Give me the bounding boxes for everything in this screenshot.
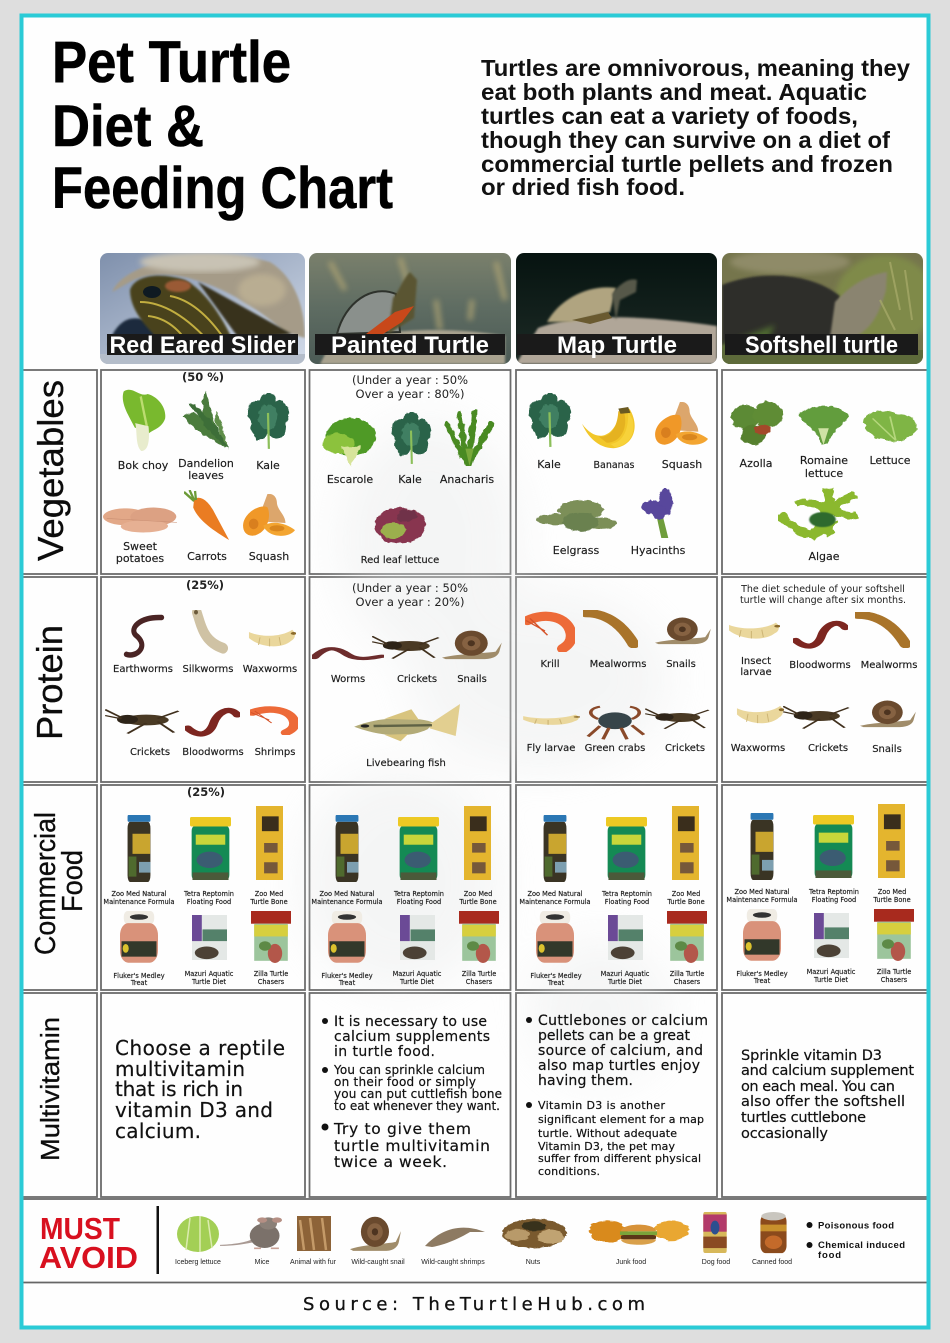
product: Fluker's Medley Treat: Treat (753, 977, 771, 985)
item: dandelion leaves (178, 391, 234, 482)
intro text block: though they can survive on a diet of (481, 127, 890, 153)
product: Tetra Reptomin Floating Food: Floating Food (187, 898, 231, 906)
bullet: calcium supplements: calcium supplements (334, 1029, 490, 1045)
item: bloodworms: Bloodworms (789, 660, 851, 671)
source line: Source: TheTurtleHub.com (303, 1294, 645, 1315)
item: eelgrass (536, 500, 617, 557)
intro text block: or dried fish food. (481, 174, 685, 200)
item: snails: Snails (666, 659, 696, 670)
item: silkworms (183, 610, 233, 675)
panel: multivitamin, softshell turtle: turtles cuttlebone (741, 1110, 866, 1126)
product: Zoo Med Turtle Bone: Zoo Med (672, 890, 700, 898)
product: Fluker's Medley Treat: Fluker's Medley (530, 972, 582, 980)
photo: Map Turtle (516, 253, 717, 364)
item: canned food: Canned food (752, 1259, 792, 1266)
item: kale (528, 393, 571, 471)
photo: Red Eared Slider (100, 252, 305, 366)
panel: protein, painted turtle (314, 581, 502, 769)
item: mealworms (586, 613, 646, 670)
product: Mazuri Aquatic Turtle Diet: Turtle Diet (191, 978, 226, 986)
item: crickets (105, 710, 178, 758)
panel: multivitamin, red eared slider (115, 1036, 285, 1143)
item: crickets: Crickets (397, 674, 437, 685)
item: snails (655, 618, 711, 670)
product: Fluker's Medley Treat (530, 911, 582, 987)
share note: Over a year : 20%) (356, 595, 464, 609)
panel: multivitamin, red eared slider: that is rich in (115, 1077, 243, 1101)
bullet: cuttlebones: having them. (538, 1073, 633, 1089)
product: Tetra Reptomin Floating Food: Floating Food (397, 898, 441, 906)
bullet: calcium supplements (322, 1014, 490, 1060)
panel: multivitamin, softshell turtle: on each meal. You can (741, 1079, 895, 1095)
item: kale (247, 393, 289, 472)
item: romaine lettuce (798, 406, 849, 480)
share note: (25%) (187, 785, 225, 799)
product: Zoo Med Turtle Bone: Turtle Bone (666, 898, 705, 906)
item: crickets: Crickets (665, 743, 705, 754)
item: lettuce: Lettuce (869, 454, 911, 467)
item: anacharis (440, 413, 494, 486)
bullet: sprinkle calcium: You can sprinkle calcium (333, 1063, 485, 1077)
item: wild-caught snail (350, 1217, 405, 1266)
product: Zilla Turtle Chasers: Zilla Turtle (670, 970, 704, 978)
product: Fluker's Medley Treat (736, 909, 788, 985)
item: mice (220, 1217, 282, 1266)
bullet: twice a week: turtle multivitamin (334, 1137, 490, 1155)
bullet: cuttlebones: also map turtles enjoy (538, 1058, 700, 1074)
panel: multivitamin, softshell turtle: occasionally (741, 1126, 828, 1142)
item: kale (391, 412, 431, 486)
bullet: cuttlebones: Cuttlebones or calcium (538, 1013, 708, 1029)
product: Zoo Med Turtle Bone (458, 806, 497, 906)
item: sweet potatoes: potatoes (116, 552, 164, 565)
item: carrots (184, 490, 229, 563)
row label: Vegetables: Vegetables (30, 380, 71, 561)
bullet: vitamin D3: suffer from different physical (538, 1152, 701, 1165)
product: Zilla Turtle Chasers: Chasers (466, 978, 493, 986)
item: dog food (702, 1212, 730, 1266)
item: red leaf lettuce (361, 508, 439, 566)
product: Tetra Reptomin Floating Food: Tetra Reptomin (183, 890, 234, 898)
product: Zilla Turtle Chasers (874, 909, 914, 984)
intro text block: commercial turtle pellets and frozen (481, 151, 893, 177)
product: Mazuri Aquatic Turtle Diet: Mazuri Aquatic (601, 970, 650, 978)
item: waxworms (731, 706, 785, 754)
product: Zoo Med Turtle Bone: Turtle Bone (872, 896, 911, 904)
share note: (Under a year : 50% (352, 581, 468, 595)
bullet: sprinkle calcium: to eat whenever they want. (334, 1099, 500, 1113)
item: wild-caught shrimps: Wild-caught shrimps (421, 1259, 485, 1266)
product: Mazuri Aquatic Turtle Diet (393, 915, 442, 986)
product: Zilla Turtle Chasers: Chasers (881, 976, 908, 984)
panel: commercial food, painted turtle (311, 806, 499, 987)
product: Zoo Med Natural Maintenance Formula: Maintenance Formula (519, 898, 591, 906)
must avoid heading (39, 1211, 138, 1275)
product: Zoo Med Natural Maintenance Formula (103, 815, 175, 906)
product: Zoo Med Natural Maintenance Formula: Zoo Med Natural (111, 890, 167, 898)
product: Tetra Reptomin Floating Food (393, 817, 444, 906)
item: shrimps: Shrimps (255, 747, 295, 758)
item: wild-caught snail: Wild-caught snail (351, 1259, 405, 1266)
item: bananas (582, 407, 635, 471)
row label: Commercial Food: Food (57, 850, 89, 912)
item: waxworms (243, 630, 297, 675)
item: romaine lettuce: lettuce (805, 467, 843, 480)
item: insect larvae (729, 623, 781, 678)
product: Tetra Reptomin Floating Food: Floating Food (605, 898, 649, 906)
panel: commercial food, red eared slider (103, 785, 291, 987)
share note: (Under a year : 50% (352, 373, 468, 387)
bullet: sprinkle calcium: you can put cuttlefish bone (334, 1087, 502, 1101)
schedule note: turtle will change after six months. (740, 595, 906, 606)
item: canned food (752, 1212, 792, 1266)
item: green crabs: Green crabs (585, 743, 645, 754)
product: Tetra Reptomin Floating Food (183, 817, 234, 906)
product: Mazuri Aquatic Turtle Diet: Mazuri Aquatic (807, 968, 856, 976)
item: iceberg lettuce (175, 1216, 221, 1266)
item: junk food: Junk food (616, 1259, 646, 1266)
item: snails: Snails (872, 744, 902, 755)
item: mealworms (858, 615, 917, 671)
item: bloodworms (789, 623, 851, 671)
item: bloodworms: Bloodworms (182, 747, 244, 758)
product: Tetra Reptomin Floating Food: Tetra Reptomin (601, 890, 652, 898)
item: dandelion leaves: Dandelion (178, 457, 234, 470)
product: Zoo Med Turtle Bone (249, 806, 288, 906)
panel: protein, red eared slider (105, 578, 297, 758)
row divider lines (22, 1199, 928, 1282)
intro text block: Turtles are omnivorous, meaning they (481, 55, 910, 81)
panel: vegetables, map turtle (528, 393, 708, 557)
photo: Painted Turtle (309, 253, 511, 364)
product: Zoo Med Natural Maintenance Formula: Maintenance Formula (103, 898, 175, 906)
product: Zoo Med Natural Maintenance Formula: Maintenance Formula (311, 898, 383, 906)
item: mice: Mice (255, 1259, 269, 1266)
product: Tetra Reptomin Floating Food: Tetra Reptomin (393, 890, 444, 898)
product: Tetra Reptomin Floating Food (808, 815, 859, 904)
schedule note: The diet schedule of your softshell (740, 584, 905, 595)
item: red leaf lettuce: Red leaf lettuce (361, 555, 439, 566)
product: Zoo Med Natural Maintenance Formula (311, 815, 383, 906)
product: Zoo Med Natural Maintenance Formula: Zoo Med Natural (527, 890, 583, 898)
caption: Red Eared Slider: Red Eared Slider (110, 332, 296, 359)
faint turtle watermark (300, 420, 670, 1080)
product: Mazuri Aquatic Turtle Diet (185, 915, 234, 986)
item: kale: Kale (537, 458, 561, 471)
product: Fluker's Medley Treat: Treat (338, 979, 356, 987)
item: dog food: Dog food (702, 1259, 730, 1266)
item: junk food (588, 1221, 689, 1266)
panel: protein, softshell turtle (729, 584, 917, 755)
grid cell frames (21, 370, 928, 1197)
item: animal with fur (290, 1216, 337, 1266)
product: Mazuri Aquatic Turtle Diet (807, 913, 856, 984)
item: dandelion leaves: leaves (188, 469, 224, 482)
item: waxworms: Waxworms (731, 743, 785, 754)
item: kale: Kale (256, 459, 280, 472)
title (52, 30, 393, 221)
item: romaine lettuce: Romaine (800, 454, 848, 467)
caption: Map Turtle (517, 332, 712, 359)
product: Zoo Med Turtle Bone: Turtle Bone (458, 898, 497, 906)
product: Fluker's Medley Treat: Fluker's Medley (736, 970, 788, 978)
bullet: twice a week (322, 1120, 490, 1171)
product: Zilla Turtle Chasers: Zilla Turtle (254, 970, 288, 978)
bullet: vitamin D3 (526, 1099, 704, 1178)
item: hyacinths: Hyacinths (631, 544, 686, 557)
item: eelgrass: Eelgrass (553, 544, 600, 557)
item: nuts: Nuts (526, 1259, 541, 1266)
product: Zilla Turtle Chasers: Zilla Turtle (462, 970, 496, 978)
product: Fluker's Medley Treat: Fluker's Medley (113, 972, 165, 980)
item: crickets: Crickets (808, 743, 848, 754)
title: Diet & (52, 94, 204, 159)
item: lettuce (862, 411, 918, 467)
item: crickets (645, 709, 709, 754)
product: Zilla Turtle Chasers: Zilla Turtle (877, 968, 911, 976)
item: snails: Snails (457, 674, 487, 685)
product: Zoo Med Turtle Bone: Zoo Med (464, 890, 492, 898)
panel: must avoid (39, 1206, 905, 1275)
share note (352, 581, 468, 609)
schedule note (740, 584, 906, 606)
share note: Over a year : 80%) (356, 387, 464, 401)
product: Zoo Med Turtle Bone (666, 806, 705, 906)
item: fly larvae: Fly larvae (527, 743, 575, 754)
bullet: calcium supplements: It is necessary to use (334, 1014, 487, 1030)
item: krill: Krill (540, 659, 560, 670)
title: Pet Turtle (52, 30, 291, 95)
item: krill (526, 616, 571, 670)
panel: multivitamin, map turtle (526, 1013, 708, 1178)
item: green crabs (585, 707, 645, 754)
product: Fluker's Medley Treat (113, 911, 165, 987)
item: mealworms: Mealworms (861, 660, 917, 671)
item: mealworms: Mealworms (590, 659, 646, 670)
product: Zilla Turtle Chasers (251, 911, 291, 986)
must avoid heading: AVOID (39, 1240, 138, 1275)
item: squash (655, 402, 708, 471)
share note: (50 %) (182, 370, 224, 384)
item: silkworms: Silkworms (183, 664, 233, 675)
item: insect larvae: larvae (740, 667, 772, 678)
product: Tetra Reptomin Floating Food: Floating Food (812, 896, 856, 904)
title: Feeding Chart (52, 156, 393, 221)
item: crickets: Crickets (130, 747, 170, 758)
panel: multivitamin, painted turtle (322, 1014, 502, 1171)
product: Zilla Turtle Chasers (667, 911, 707, 986)
item: crickets (372, 636, 439, 685)
bullet: twice a week: Try to give them (333, 1120, 471, 1138)
bullet: vitamin D3: significant element for a map (538, 1113, 704, 1126)
product: Fluker's Medley Treat: Fluker's Medley (321, 972, 373, 980)
item: escarole (322, 418, 376, 486)
item: bok choy (118, 390, 169, 472)
item: insect larvae: Insect (741, 656, 771, 667)
must avoid heading: MUST (40, 1211, 120, 1246)
product: Zoo Med Natural Maintenance Formula: Maintenance Formula (726, 896, 798, 904)
caption: Map Turtle: Map Turtle (557, 332, 677, 359)
share note (352, 373, 468, 401)
panel: vegetables, painted turtle (322, 373, 494, 566)
item: anacharis: Anacharis (440, 473, 494, 486)
product: Mazuri Aquatic Turtle Diet: Mazuri Aquatic (393, 970, 442, 978)
item: bloodworms (182, 710, 244, 758)
item: worms: Worms (331, 674, 365, 685)
item: hyacinths (631, 488, 686, 557)
row label: Multivitamin: Multivitamin (35, 1017, 65, 1161)
panel: multivitamin, softshell turtle: Sprinkle vitamin D3 (741, 1048, 882, 1064)
panel: multivitamin, softshell turtle: and calcium supplement (741, 1063, 914, 1079)
product: Mazuri Aquatic Turtle Diet: Turtle Diet (813, 976, 848, 984)
product: Zoo Med Turtle Bone: Turtle Bone (249, 898, 288, 906)
item: squash: Squash (662, 458, 702, 471)
intro text block: eat both plants and meat. Aquatic (481, 79, 867, 105)
item: fly larvae (523, 715, 581, 754)
row label: Commercial Food: Commercial (30, 812, 62, 955)
product: Zoo Med Natural Maintenance Formula (519, 815, 591, 906)
panel: protein, map turtle (523, 613, 711, 754)
product: Zoo Med Natural Maintenance Formula (726, 813, 798, 904)
bullet: sprinkle calcium (322, 1063, 502, 1113)
item: squash (243, 494, 295, 563)
item: nuts (501, 1219, 567, 1266)
panel: multivitamin, red eared slider: vitamin D3 and (115, 1098, 273, 1122)
panel: commercial food, softshell turtle (726, 804, 914, 985)
panel: multivitamin, red eared slider: calcium. (115, 1119, 201, 1143)
bullet list: other foods: food (818, 1250, 841, 1261)
product: Fluker's Medley Treat (321, 911, 373, 987)
item: algae: Algae (808, 550, 840, 563)
item: livebearing fish (354, 704, 460, 769)
intro text block: turtles can eat a variety of foods, (481, 103, 858, 129)
product: Zoo Med Turtle Bone: Zoo Med (255, 890, 283, 898)
bullet: calcium supplements: in turtle food. (334, 1044, 435, 1060)
product: Mazuri Aquatic Turtle Diet (601, 915, 650, 986)
bullet: cuttlebones: pellets can be a great (538, 1028, 690, 1044)
item: sweet potatoes: Sweet (123, 540, 158, 553)
item: squash: Squash (249, 550, 289, 563)
panel: multivitamin, red eared slider: multivitamin (115, 1057, 245, 1081)
bullet: vitamin D3: Vitamin D3, the pet may (538, 1140, 675, 1153)
bullet list: other foods: Poisonous food (818, 1220, 894, 1232)
product: Zilla Turtle Chasers (459, 911, 499, 986)
product: Zoo Med Natural Maintenance Formula: Zoo Med Natural (734, 888, 790, 896)
item: kale: Kale (398, 473, 422, 486)
product: Tetra Reptomin Floating Food (601, 817, 652, 906)
panel: vegetables, softshell turtle (730, 402, 918, 563)
item: sweet potatoes (102, 507, 179, 565)
bullet list: other foods: Chemical induced (818, 1240, 905, 1251)
product: Mazuri Aquatic Turtle Diet: Turtle Diet (607, 978, 642, 986)
product: Fluker's Medley Treat: Treat (547, 979, 565, 987)
intro text block (481, 55, 910, 200)
item: crickets (783, 706, 849, 754)
item: azolla (730, 402, 783, 470)
item: shrimps (251, 710, 295, 758)
item: livebearing fish: Livebearing fish (366, 758, 446, 769)
share note: (25%) (186, 578, 224, 592)
caption: Painted Turtle: Painted Turtle (331, 332, 489, 359)
bullet list: other foods (806, 1220, 905, 1261)
product: Zoo Med Turtle Bone: Zoo Med (878, 888, 906, 896)
bullet: vitamin D3: Vitamin D3 is another (538, 1099, 665, 1112)
bullet: cuttlebones: source of calcium, and (538, 1043, 703, 1059)
item: earthworms (113, 617, 173, 675)
product: Mazuri Aquatic Turtle Diet: Turtle Diet (399, 978, 434, 986)
row label: Commercial Food (30, 812, 89, 955)
item: earthworms: Earthworms (113, 664, 173, 675)
panel: multivitamin, red eared slider: Choose a reptile (115, 1036, 285, 1060)
item: iceberg lettuce: Iceberg lettuce (175, 1259, 221, 1266)
product: Fluker's Medley Treat: Treat (130, 979, 148, 987)
item: carrots: Carrots (187, 550, 227, 563)
product: Zoo Med Turtle Bone (872, 804, 911, 904)
product: Tetra Reptomin Floating Food: Tetra Reptomin (808, 888, 859, 896)
caption: Softshell turtle: Softshell turtle (745, 332, 898, 359)
item: worms (314, 649, 382, 685)
bullet: sprinkle calcium: on their food or simply (334, 1075, 476, 1089)
product: Zilla Turtle Chasers: Chasers (258, 978, 285, 986)
item: animal with fur: Animal with fur (290, 1259, 337, 1266)
item: waxworms: Waxworms (243, 664, 297, 675)
item: wild-caught shrimps (421, 1228, 485, 1266)
row label: Protein: Protein (29, 625, 70, 740)
item: escarole: Escarole (327, 473, 373, 486)
photo: Softshell turtle (722, 250, 935, 364)
panel: commercial food, map turtle (519, 806, 707, 987)
panel: multivitamin, softshell turtle (741, 1048, 914, 1142)
item: bok choy: Bok choy (118, 459, 169, 472)
bullet: vitamin D3: turtle. Without adequate (538, 1127, 677, 1140)
item: bananas: Bananas (594, 460, 635, 471)
product: Zilla Turtle Chasers: Chasers (674, 978, 701, 986)
item: azolla: Azolla (740, 457, 772, 470)
item: snails (442, 631, 502, 685)
bullet: vitamin D3: conditions. (538, 1165, 600, 1178)
bullet: cuttlebones (526, 1013, 708, 1089)
product: Zoo Med Natural Maintenance Formula: Zoo Med Natural (319, 890, 375, 898)
bullet: twice a week: twice a week. (334, 1153, 447, 1171)
divider bar (156, 1206, 159, 1274)
panel: vegetables, red eared slider (102, 370, 295, 565)
product: Mazuri Aquatic Turtle Diet: Mazuri Aquatic (185, 970, 234, 978)
panel: multivitamin, softshell turtle: also offer the softshell (741, 1094, 905, 1110)
item: snails (860, 701, 916, 755)
item: algae (778, 489, 858, 563)
